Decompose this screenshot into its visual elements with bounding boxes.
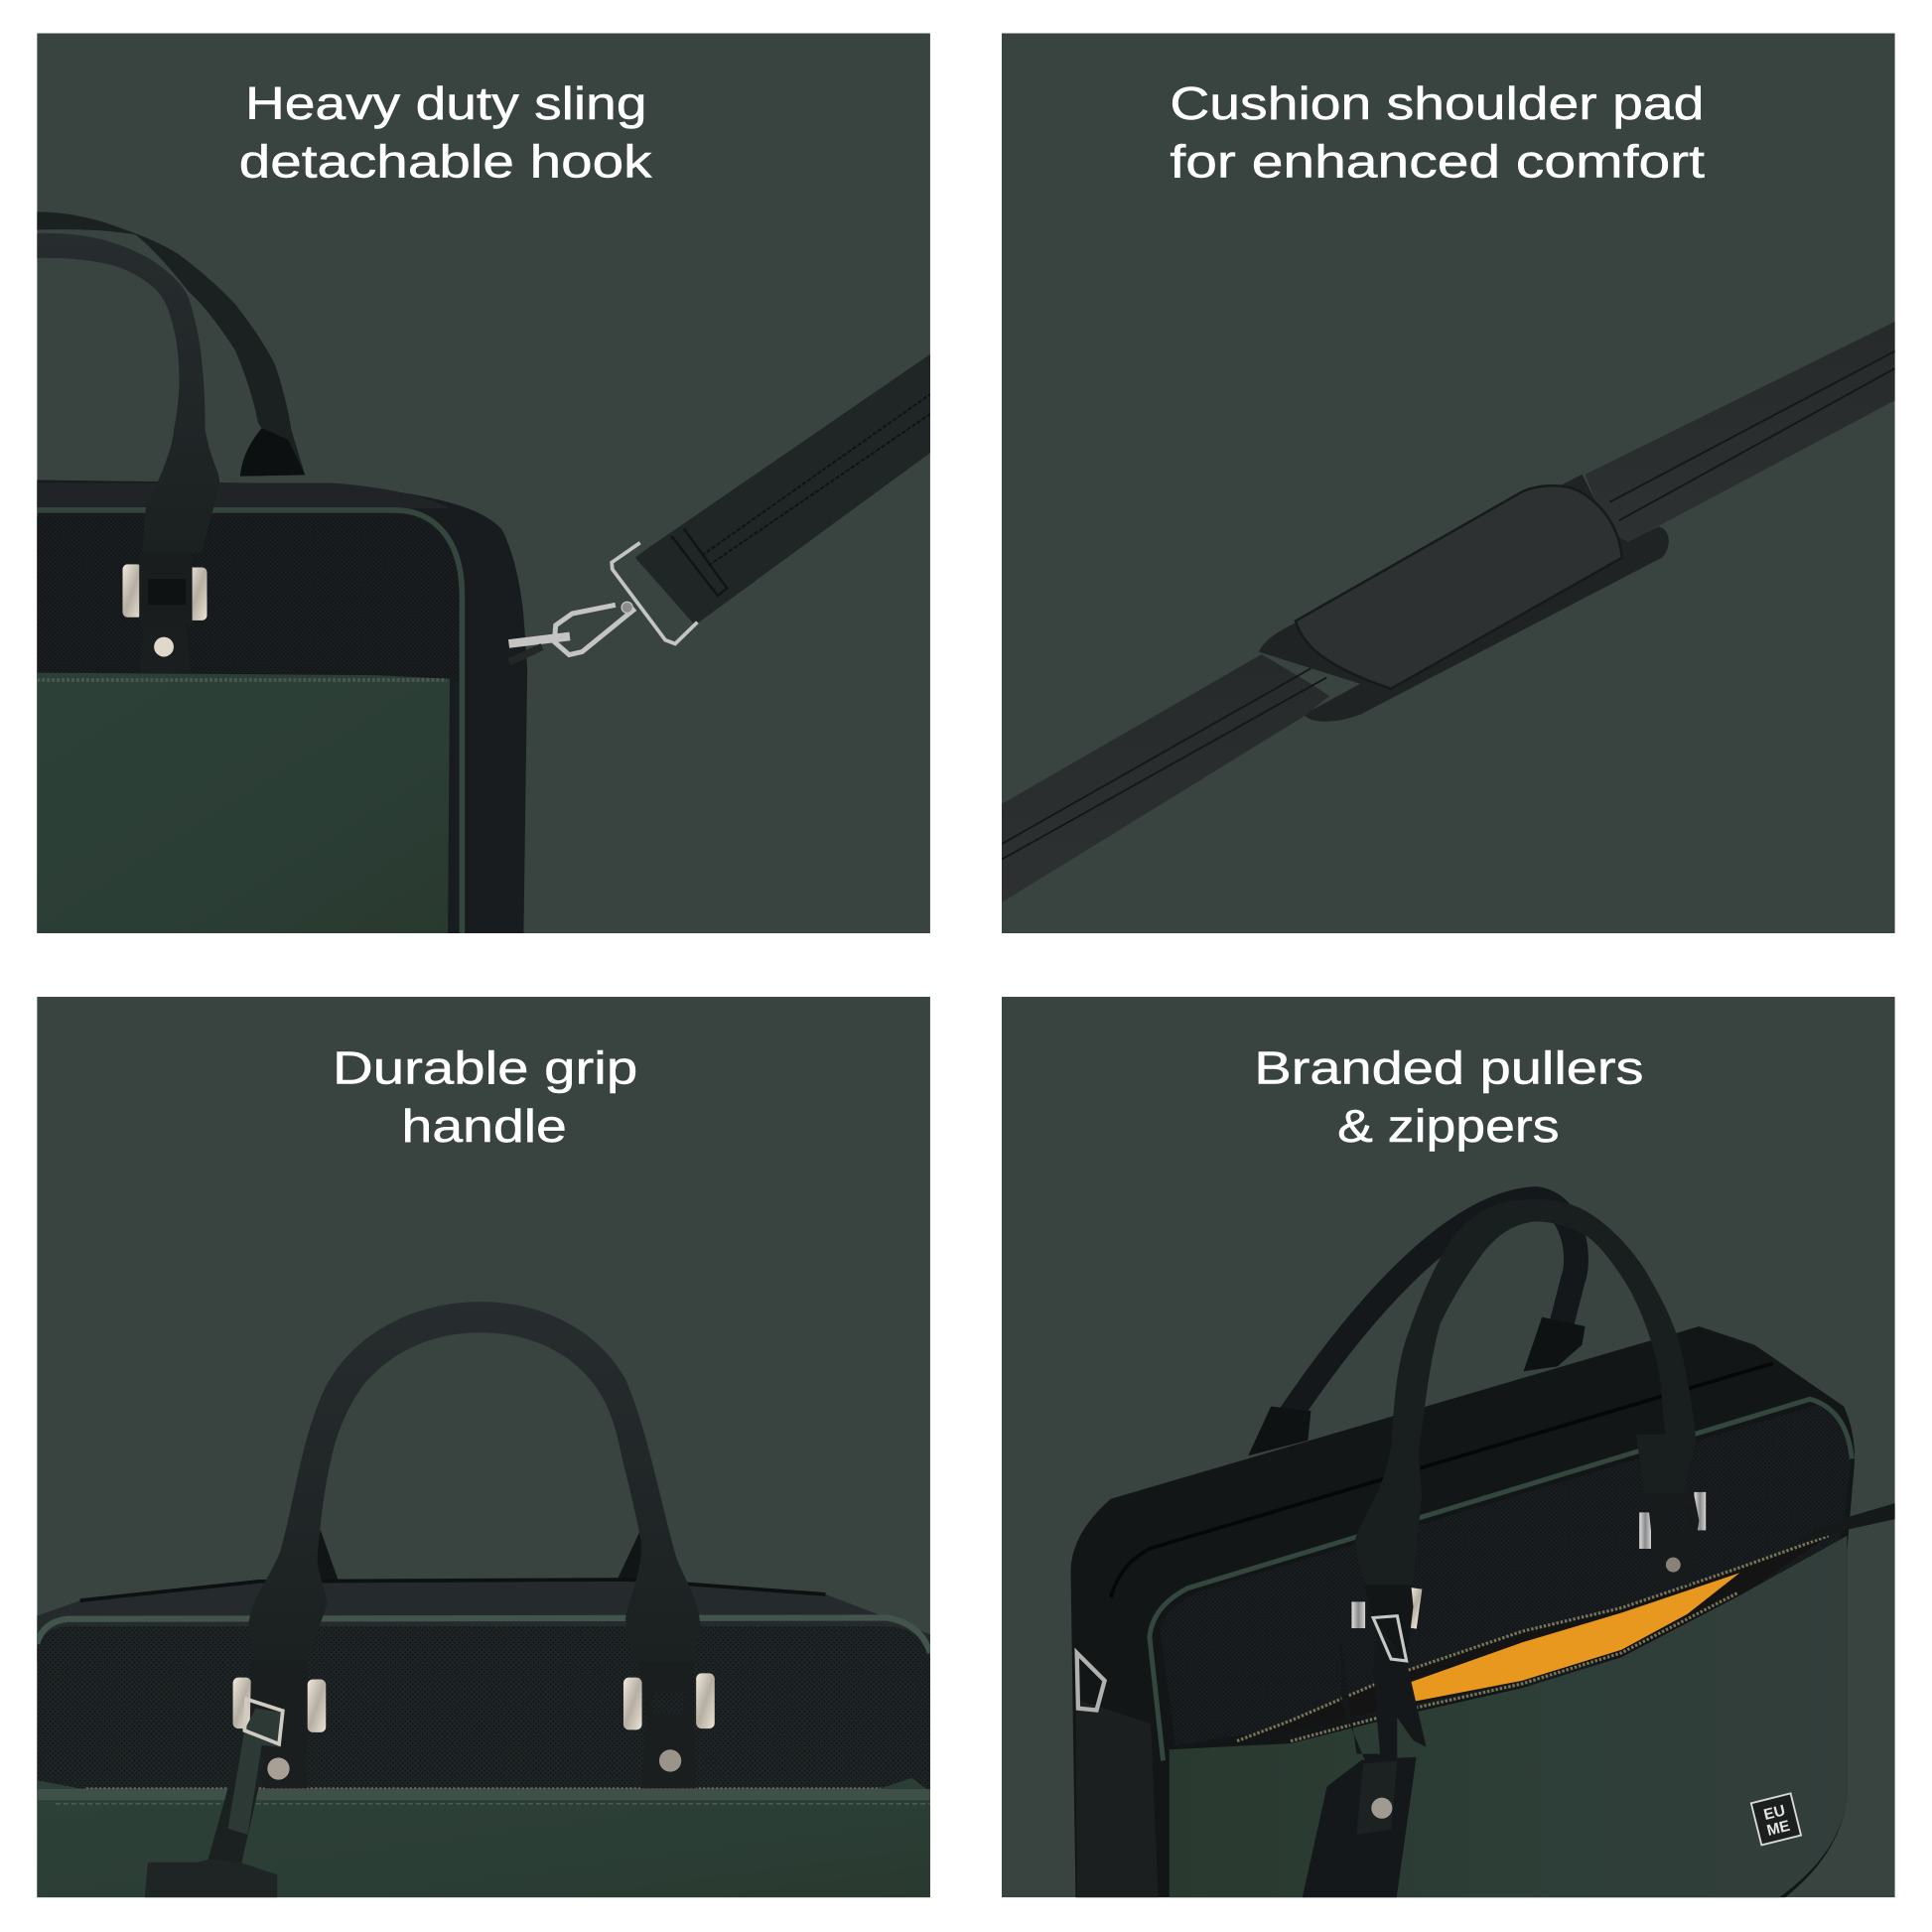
- swivel hook: [509, 543, 697, 662]
- panel: branded pullers and zippers: [1002, 997, 1895, 1899]
- buckle: [122, 553, 207, 625]
- tag strap: [145, 1699, 285, 1897]
- side panel: [1075, 1699, 1159, 1897]
- bag top: [37, 1302, 930, 1897]
- heading: heavy duty sling: [240, 85, 653, 179]
- heading: branded pullers and zippers: & zippers: [1337, 1100, 1560, 1152]
- heading: branded pullers and zippers: Branded pullers: [1254, 1042, 1644, 1094]
- D ring: [1077, 1653, 1105, 1711]
- heading: durable grip handle: [337, 1050, 635, 1143]
- heading: cushion shoulder pad: [1170, 85, 1705, 179]
- brand badge: ME: [1765, 1818, 1792, 1840]
- pocket: [37, 1778, 930, 1897]
- zipper teeth: [1237, 1536, 1829, 1741]
- heading: branded pullers and zippers: [1254, 1042, 1644, 1152]
- back handle: [37, 211, 305, 477]
- zipper opening: [1237, 1536, 1829, 1741]
- bag side view: [37, 211, 527, 933]
- green piping: [1150, 1399, 1852, 1760]
- heading: cushion shoulder pad: Cushion shoulder pad: [1170, 77, 1704, 129]
- front handle: [37, 233, 219, 553]
- strap tab with rivet: [140, 625, 191, 673]
- handle: [248, 1302, 701, 1663]
- brand badge: EU: [1762, 1802, 1787, 1824]
- cushion pad: [1296, 485, 1622, 689]
- top zipper: [1111, 1363, 1773, 1597]
- tag and strap: [1303, 1582, 1427, 1897]
- panel: cushion shoulder pad: [1002, 34, 1895, 933]
- under pad: [1259, 475, 1669, 722]
- heading: heavy duty sling: detachable hook: [239, 136, 653, 188]
- mesh front panel: [1160, 1404, 1851, 1745]
- green front pocket: [1170, 1536, 1847, 1897]
- panel: durable grip handle: [37, 997, 930, 1897]
- mesh panel: [37, 1626, 930, 1791]
- front handle: [1355, 1199, 1696, 1586]
- heading: durable grip handle: handle: [402, 1100, 567, 1152]
- back handle bases: [311, 1530, 647, 1583]
- right lug and rivet: [1639, 1489, 1706, 1586]
- bag body: [37, 480, 527, 933]
- orange lining: [1401, 1573, 1739, 1703]
- green piping: [37, 510, 462, 933]
- strap: [1002, 322, 1895, 902]
- right buckle and strap: [623, 1662, 715, 1788]
- bag body: [1070, 1326, 1855, 1899]
- strap end at zipper: [1795, 1503, 1895, 1542]
- heading: heavy duty sling: Heavy duty sling: [245, 77, 647, 129]
- back handle: [1248, 1199, 1586, 1455]
- pocket zipper: [37, 678, 447, 682]
- fabric band: [37, 1580, 930, 1662]
- shoulder strap: [635, 354, 930, 625]
- panel: heavy duty sling detachable hook: [37, 34, 930, 933]
- top fabric band: [37, 483, 397, 508]
- mesh front panel: [37, 516, 459, 681]
- green piping: [37, 1617, 930, 1653]
- heading: cushion shoulder pad: for enhanced comfort: [1170, 136, 1705, 188]
- brand badge: [1751, 1793, 1801, 1845]
- left buckle and strap: [233, 1660, 326, 1788]
- heading: durable grip handle: Durable grip: [333, 1042, 637, 1094]
- front pocket: [37, 673, 450, 933]
